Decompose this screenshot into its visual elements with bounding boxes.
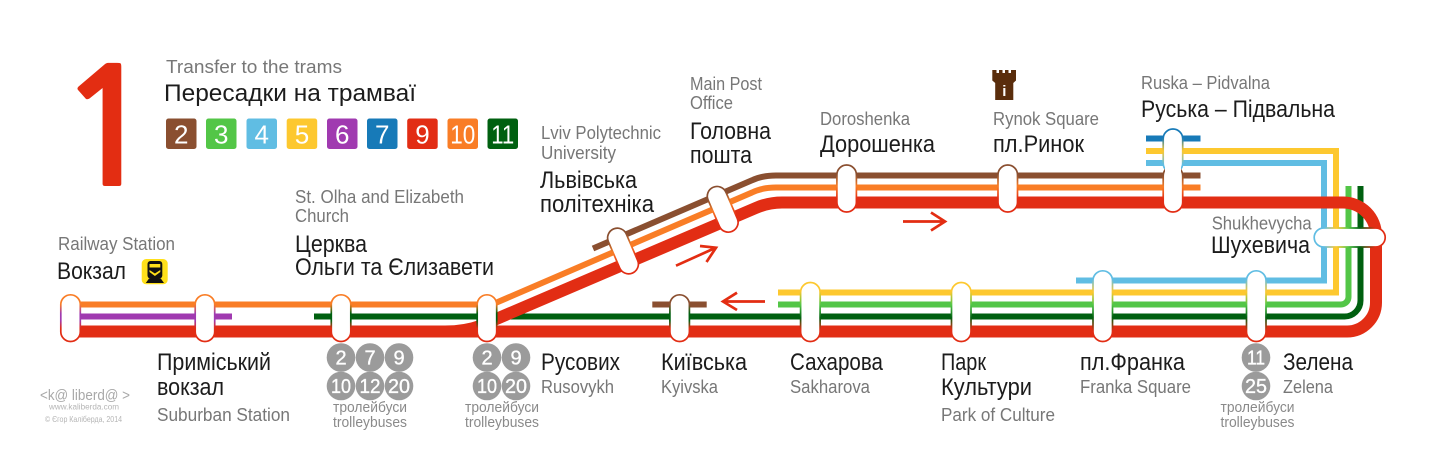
trolleybus badges: Русових: 20: [505, 376, 527, 398]
label: Приміський вокзал: Приміський: [157, 349, 271, 376]
trolleybus badges: Церква: 2: [335, 348, 347, 370]
label: Парк Культури: Парк: [941, 349, 986, 376]
label: Парк Культури: Культури: [941, 374, 1032, 401]
label: Зелена: Зелена: [1283, 349, 1354, 376]
label: Головна пошта: Головна: [690, 118, 772, 145]
trolleybus badges: Зелена: 25: [1245, 376, 1267, 398]
station: Вокзал: [61, 295, 80, 342]
trolleybus badges: Церква: 7: [364, 348, 376, 370]
arrow: direction right: [903, 212, 945, 230]
icon: tower with info sign: i: [1002, 83, 1006, 100]
label: Руська – Підвальна: Руська – Підвальна: [1141, 96, 1336, 123]
tram lines: [62, 138, 1376, 332]
label: пл.Франка: Franka Square: [1080, 377, 1191, 397]
big line number 1: 1: [55, 50, 161, 210]
icon: tower with info sign: [992, 70, 1016, 100]
label: Дорошенка: Дорошенка: [820, 131, 936, 158]
trolleybus badges: Русових: 2: [481, 348, 493, 370]
station: Руська – Підвальна: [1163, 129, 1183, 212]
label: Церква Ольги та Єлизавети: Church: [295, 206, 349, 226]
line 6 purple: [62, 314, 232, 320]
label: Київська: Kyivska: [661, 377, 719, 397]
trolleybus badges: Церква: 12: [360, 376, 380, 398]
trolleybus badges: Церква: [327, 343, 413, 431]
label: Львівська політехніка: політехніка: [540, 191, 655, 218]
icon: railway station train: [142, 259, 168, 284]
trolleybus badges: Русових: 10: [477, 376, 497, 398]
legend: tram number badges: 10: [450, 120, 475, 150]
station: Церква Ольги та Єлизавети: [331, 295, 351, 342]
label: Сахарова: Sakharova: [790, 377, 871, 397]
legend: tram number badges: 3: [214, 120, 228, 150]
line 11 dark green: [314, 186, 1360, 317]
line 9 red: [62, 202, 1376, 332]
legend: tram number badges: 6: [335, 120, 349, 150]
label: Сахарова: Сахарова: [790, 349, 884, 376]
label: пл.Франка: [1080, 349, 1191, 397]
station: Сахарова: [801, 282, 820, 342]
label: Русових: [541, 349, 620, 397]
label: пл.Ринок: Rynok Square: [993, 109, 1099, 129]
trolleybus badges: Церква: 10: [331, 376, 351, 398]
legend: tram number badges: 4: [254, 120, 269, 150]
label: Дорошенка: Doroshenka: [820, 109, 911, 129]
line 3 green: [778, 186, 1348, 304]
label: Парк Культури: Park of Culture: [941, 405, 1055, 425]
station: Головна пошта: [704, 183, 741, 235]
label: Руська – Підвальна: Ruska – Pidvalna: [1141, 73, 1271, 93]
heading: transfer to the trams: [164, 57, 416, 107]
legend: tram number badges: 11: [491, 120, 514, 150]
label: Приміський вокзал: [157, 349, 290, 425]
label: Русових: Русових: [541, 349, 620, 376]
arrow: direction left: [723, 293, 765, 310]
label: Вокзал: [57, 234, 175, 285]
logo: kaliberda: <k@ liberd@ >: [40, 387, 130, 404]
label: Львівська політехніка: [540, 123, 661, 218]
line 2 brown, upper section: [593, 176, 1200, 248]
line 5 yellow: [778, 151, 1336, 292]
label: Церква Ольги та Єлизавети: Ольги та Єлизавети: [295, 254, 494, 281]
station: Дорошенка: [837, 165, 856, 212]
legend: tram number badges: 5: [295, 120, 309, 150]
trolleybus badges: Русових: [465, 343, 539, 431]
label: Шухевича: Shukhevycha: [1212, 213, 1313, 233]
label: Русових: Rusovykh: [541, 377, 614, 397]
station: пл.Франка: [1093, 271, 1112, 342]
legend: tram number badges: 9: [415, 120, 430, 150]
label: Головна пошта: Office: [690, 93, 733, 113]
trolleybus badges: Зелена: [1220, 343, 1294, 431]
station: Львівська політехніка: [605, 225, 641, 277]
label: Львівська політехніка: University: [541, 143, 616, 163]
label: Сахарова: [790, 349, 884, 397]
label: Львівська політехніка: Lviv Polytechnic: [541, 123, 661, 143]
legend: tram number badges: 7: [375, 120, 389, 150]
label: Шухевича: [1211, 213, 1313, 259]
trolleybus badges: Церква: 20: [388, 376, 410, 398]
station: Русових: [477, 295, 497, 342]
label: Церква Ольги та Єлизавети: [295, 187, 494, 281]
trolleybus badges: Церква: 9: [393, 348, 405, 370]
logo: kaliberda: [40, 387, 130, 424]
arrow: direction up the slope: [676, 246, 716, 266]
trolleybus badges: Русових: trolleybuses: [465, 414, 539, 431]
line 7 blue: [1146, 136, 1200, 142]
label: Зелена: [1283, 349, 1354, 397]
label: Церква Ольги та Єлизавети: St. Olha and Elizabeth: [295, 187, 464, 207]
trolleybus badges: Русових: тролейбуси: [465, 399, 539, 416]
label: Дорошенка: [820, 109, 936, 158]
logo: kaliberda: www.kaliberda.com: [48, 402, 119, 412]
label: пл.Ринок: пл.Ринок: [993, 131, 1084, 158]
label: Церква Ольги та Єлизавети: Церква: [295, 231, 368, 258]
trolleybus badges: Зелена: trolleybuses: [1220, 414, 1294, 431]
station: Парк Культури: [952, 282, 971, 342]
heading: transfer to the trams: Пересадки на трамваї: [164, 80, 416, 107]
trolleybus badges: Зелена: тролейбуси: [1220, 399, 1294, 416]
label: Головна пошта: [690, 74, 772, 169]
heading: transfer to the trams: Transfer to the trams: [166, 57, 342, 77]
label: пл.Ринок: [993, 109, 1099, 158]
trolleybus badges: Русових: 9: [510, 348, 522, 370]
label: Зелена: Zelena: [1283, 377, 1334, 397]
label: Парк Культури: [941, 349, 1055, 425]
label: Приміський вокзал: вокзал: [157, 374, 224, 401]
trolleybus badges: Церква: тролейбуси: [333, 399, 407, 416]
line 10 orange: [62, 188, 1200, 304]
label: пл.Франка: пл.Франка: [1080, 349, 1186, 376]
station: пл.Ринок: [998, 165, 1018, 212]
legend: tram number badges: [166, 118, 518, 150]
stations: [61, 129, 1385, 342]
trolleybus badges: Церква: trolleybuses: [333, 414, 407, 431]
label: Шухевича: Шухевича: [1211, 232, 1311, 259]
label: Приміський вокзал: Suburban Station: [157, 405, 290, 425]
logo: kaliberda: © Єгор Калiберда, 2014: [45, 415, 122, 424]
label: Вокзал: Railway Station: [58, 234, 175, 254]
label: Вокзал: Вокзал: [57, 258, 126, 285]
legend: tram number badges: 2: [174, 120, 188, 150]
label: Київська: [661, 349, 748, 397]
station: Шухевича: [1314, 228, 1385, 247]
station: Приміський вокзал: [195, 295, 215, 342]
station: Зелена: [1246, 271, 1266, 342]
line 2 brown, lower stub: [652, 302, 707, 308]
label: Головна пошта: Main Post: [690, 74, 762, 94]
label: Київська: Київська: [661, 349, 748, 376]
station: Київська: [670, 295, 689, 342]
label: Руська – Підвальна: [1141, 73, 1336, 123]
label: Головна пошта: пошта: [690, 142, 753, 169]
label: Львівська політехніка: Львівська: [540, 167, 638, 194]
trolleybus badges: Зелена: 11: [1247, 348, 1265, 370]
line 4 light blue: [1076, 163, 1324, 280]
